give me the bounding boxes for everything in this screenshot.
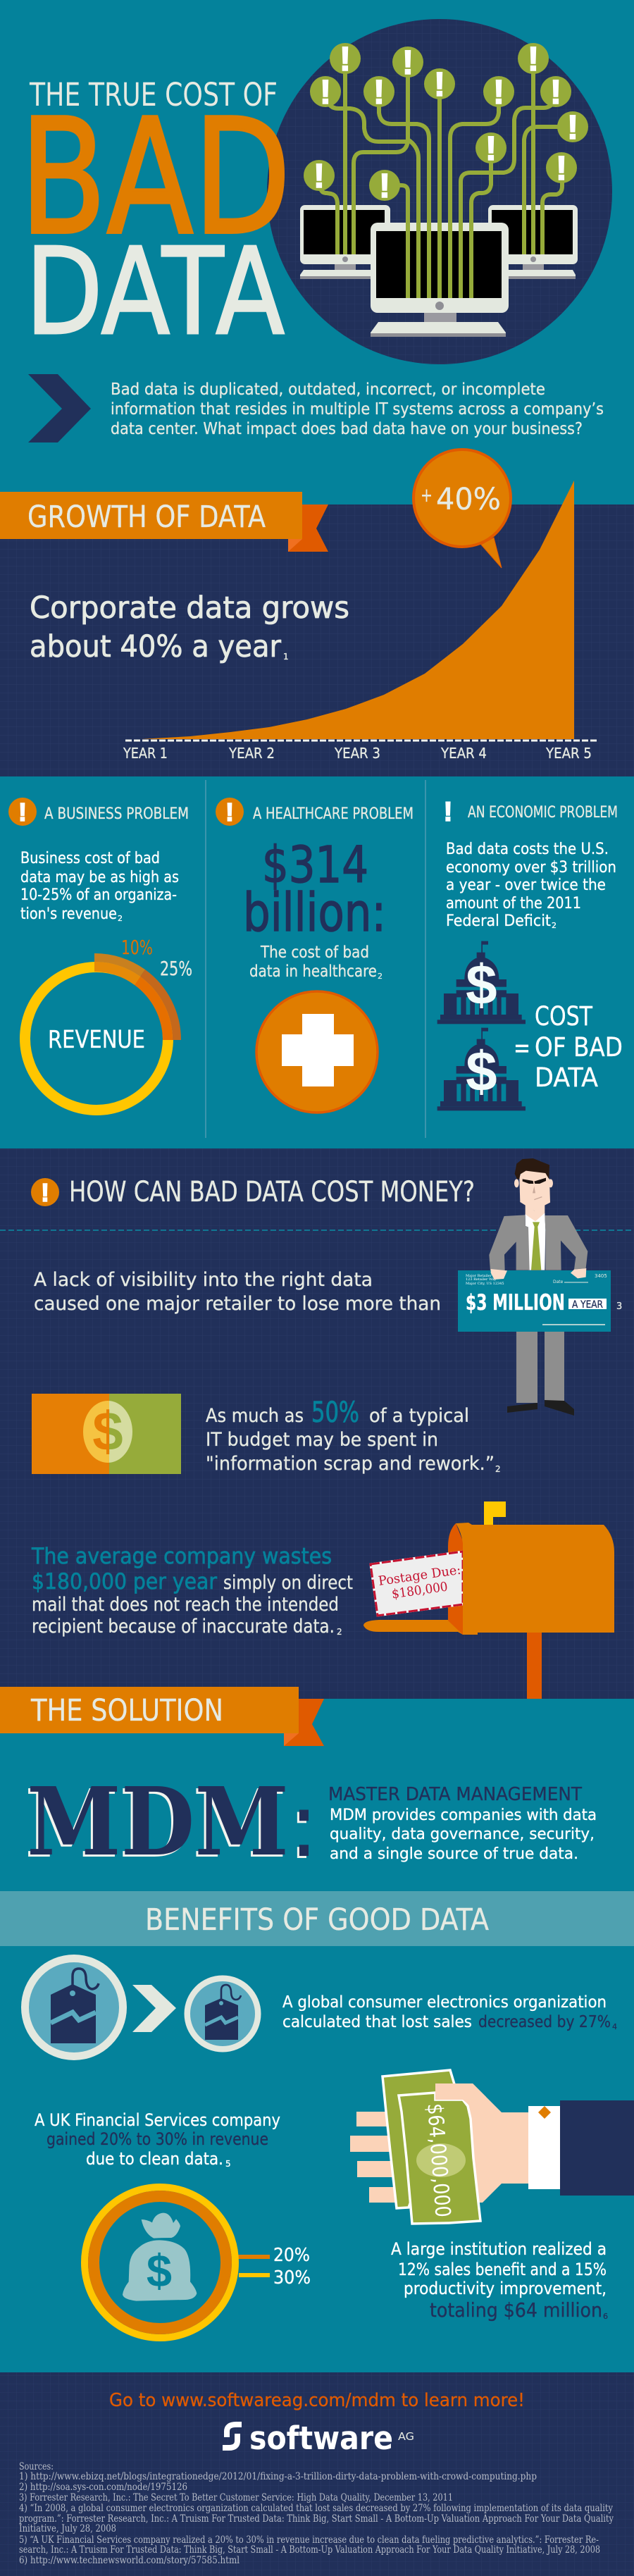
chart: revenue ring: REVENUE [48,1026,145,1054]
icon: banknote [32,1394,181,1474]
text: lost sales decreased: 4 [612,2022,617,2031]
back bill [383,2070,454,2208]
text: economy cost: 2 [552,921,557,930]
icon: mailbox [363,1501,614,1699]
text: 50% of it budget: of a typical [369,1405,469,1427]
text: cost in healthcare: 2 [378,972,383,981]
icon: alert: ! [18,798,27,826]
icon: large price tag [21,1955,127,2060]
text: lost sales decreased: A global consumer electronics organization [282,1993,607,2012]
icon: alert: ! [225,798,234,826]
icon: alert [216,798,244,826]
arrow: chevron [132,1985,176,2032]
title: BAD [20,85,291,271]
stat: $314 billion [243,836,386,943]
text: corporate data grows: about 40% a year [30,629,281,664]
icon: alert mark: ! [444,797,452,827]
sources [19,2461,614,2566]
icon: small price tag [185,1976,261,2052]
banner: the solution: THE SOLUTION [30,1693,223,1728]
area chart: data growth: YEAR 2 [228,745,275,762]
icon: capitol with dollar [437,941,526,1024]
banner: the solution [0,1687,324,1746]
text: uk financial services: due to clean data. [86,2149,223,2169]
text: = cost of bad data: = [514,1033,530,1063]
area chart: data growth: YEAR 5 [545,745,592,762]
check: $3 million a year: Major Retailer [466,1274,492,1278]
logo text: MDM: : [289,1773,319,1877]
area chart: data growth: YEAR 4 [440,745,487,762]
text: business cost: 10-25% of an organiza- [20,886,177,904]
alert balloons: ! [556,150,567,187]
text: economy cost: Bad data costs the U.S. [446,841,609,858]
text: $180,000 wasted: recipient because of inaccurate data. [32,1616,335,1637]
text: large institution: totaling $64 million [430,2298,602,2322]
text: = cost of bad data: COST [535,1001,592,1032]
sources: Initiative, July 28, 2008 [19,2523,116,2534]
alert balloons: ! [379,168,390,205]
panel dividers [206,780,425,1138]
logo: software ag: AG [398,2430,414,2443]
title: THE TRUE COST OF [29,76,278,113]
text: uk financial services: A UK Financial Services company [35,2110,280,2130]
alert balloons [304,41,588,205]
intro text [111,380,604,438]
text: 50% of it budget: As much as [206,1405,304,1427]
sources: Sources: [19,2461,54,2472]
text: business cost: 2 [118,914,123,923]
panel: a healthcare problem [216,798,414,1113]
heading: a healthcare problem: A HEALTHCARE PROBLEM [253,805,414,823]
alert balloons: ! [402,44,414,82]
intro text: Bad data is duplicated, outdated, incorrect, or incomplete [111,380,545,399]
text: cost in healthcare: data in healthcare [249,962,377,981]
front bill [399,2093,480,2224]
text: master data management: MDM provides companies with data [330,1807,597,1824]
heading: how can bad data cost money: HOW CAN BAD DATA COST MONEY? [69,1176,475,1208]
heading band: benefits of good data: BENEFITS OF GOOD DATA [145,1902,490,1938]
chart: revenue ring with money bag [85,2187,311,2338]
stat: $314 billion: billion: [243,881,386,943]
text: lost sales decreased [282,1993,617,2031]
text: retailer loss: A lack of visibility into the right data [34,1269,373,1291]
text: 50% of it budget: "information scrap and rework.” [206,1453,495,1475]
text: master data management: MASTER DATA MANAGEMENT [328,1784,582,1805]
text: corporate data grows [30,590,349,664]
callout: +40%: + [421,483,433,507]
icon: alert [8,798,37,826]
text: $180,000 wasted: The average company wastes [31,1544,332,1569]
text: 50% of it budget [206,1397,501,1475]
icon: alert: ! [41,1178,49,1207]
text: cost in healthcare [249,943,383,981]
text: master data management [328,1784,597,1863]
text: cost in healthcare: The cost of bad [260,943,369,962]
illustration: businessman holding check [458,1158,611,1416]
logo text: MDM: : [287,1775,317,1879]
logo: software ag: software [249,2420,393,2457]
text: business cost: data may be as high as [20,869,179,886]
panel: an economic problem [437,797,623,1110]
text: uk financial services [35,2110,280,2169]
chart: revenue ring with money bag: 30% [273,2267,311,2289]
alert balloons: ! [550,74,561,111]
alert balloons: ! [373,74,385,111]
icon: intro chevron [28,374,91,442]
sources: 2) http://soa.sys-con.com/node/1975126 [19,2482,187,2493]
panel: a business problem [8,798,192,1110]
panel: the solution [0,1687,597,1879]
alert balloons: ! [485,130,497,168]
text: = cost of bad data [514,1001,623,1093]
text: = cost of bad data: DATA [535,1063,598,1093]
panel: benefits of good data [0,1891,634,2338]
heading band: benefits of good data [0,1891,634,1946]
icon: banknote: $ [92,1400,123,1462]
icon: capitol with dollar: $ [466,953,497,1016]
text: lost sales decreased: decreased by 27% [478,2013,611,2031]
legs and shoes [507,1328,574,1416]
text: business cost [20,850,179,923]
sources: 1) http://www.ebizq.net/blogs/integrationedge/2012/01/fixing-a-3-trillion-dirty-data-problem-with-crowd-computing.php [19,2471,537,2482]
text: economy cost: economy over $3 trillion [446,859,616,877]
chart: revenue ring [25,936,192,1110]
text: economy cost: Federal Deficit [446,912,551,930]
icon: capitol with dollar [437,1028,526,1110]
logo text: MDM: MDM [25,1769,287,1879]
upper body and head [489,1158,588,1270]
panel: growth of data [0,450,597,762]
text: retailer loss: caused one major retailer to lose more than [34,1293,441,1315]
text: retailer loss [34,1269,441,1315]
icon: center monitor [371,223,509,337]
intro text: data center. What impact does bad data have on your business? [111,420,583,438]
alert balloons: ! [493,74,504,111]
area chart: data growth [123,481,597,762]
text: 50% of it budget: 50% [311,1397,359,1429]
chart: revenue ring: 25% [160,957,192,980]
call to action: Go to www.softwareag.com/mdm to learn more! [109,2390,525,2411]
sources: 3) Forrester Research, Inc.: The Secret To Better Customer Service: High Data Quality, December 13, 2011 [19,2492,453,2503]
text: master data management: and a single source of true data. [330,1845,578,1863]
callout: +40% [414,450,511,568]
icon: alert [31,1178,59,1207]
alert balloons: ! [434,66,445,104]
illustration: hand holding money [350,2070,634,2224]
check: $3 million a year: A YEAR [572,1299,603,1311]
icon: money bag: $ [147,2245,172,2296]
text: economy cost: a year - over twice the [446,877,606,894]
panel: hero illustration of monitors and alerts [267,19,612,364]
panel: how can bad data cost money [0,1158,634,1699]
area chart: data growth: YEAR 1 [123,745,168,762]
title: DATA [25,223,285,362]
icon: money bag [123,2213,197,2301]
logo text: MDM: MDM [27,1767,289,1877]
banner: growth of data: GROWTH OF DATA [27,500,266,535]
stat: $314 billion: $314 [262,836,368,894]
text: large institution: productivity improvement, [404,2279,607,2298]
banner: growth of data [0,492,328,552]
circuit wires [319,58,573,298]
alert balloons: ! [320,74,331,111]
chart: revenue ring with money bag: 20% [273,2245,310,2266]
alert balloons: ! [567,109,578,147]
area chart: data growth: YEAR 3 [334,745,380,762]
check: $3 million a year: Date [553,1280,564,1284]
cuff and sleeve [528,2106,560,2189]
text: $180,000 wasted: simply on direct [223,1572,353,1594]
text: large institution: A large institution realized a [391,2239,607,2259]
text: corporate data grows: 1 [283,652,289,662]
text: 50% of it budget: 2 [495,1464,501,1474]
check: $3 million a year: 3405 [595,1273,607,1279]
check: $3 million a year: 123 Retailer Way [466,1277,497,1282]
check: $3 million a year: $3 MILLION [466,1290,565,1315]
illustration: hand holding money: $64,000,000 [422,2103,455,2218]
text: uk financial services: 5 [225,2159,231,2169]
icon: left monitor [300,205,390,279]
sources: 6) http://www.technewsworld.com/story/57585.html [19,2555,240,2566]
text: economy cost: amount of the 2011 [446,895,581,912]
text: corporate data grows: Corporate data grows [30,590,349,626]
icon: banknote: $ [92,1400,123,1462]
text: master data management: quality, data governance, security, [330,1826,595,1843]
text: large institution: 6 [603,2312,608,2321]
title [20,76,291,362]
alert balloons: ! [528,41,539,78]
alert balloons: ! [313,158,325,195]
heading: a business problem: A BUSINESS PROBLEM [44,805,189,823]
alert balloons: ! [340,41,351,78]
panel: footer [19,2390,614,2566]
footnote 3: 3 [616,1301,622,1312]
text: 50% of it budget: IT budget may be spent in [206,1429,438,1451]
text: uk financial services: gained 20% to 30% in revenue [46,2129,268,2149]
callout: +40%: 40% [436,482,501,517]
postage due card: Postage Due: [378,1563,462,1589]
text: $180,000 wasted [31,1544,353,1637]
text: business cost: Business cost of bad [20,850,160,867]
hands [491,1268,586,1280]
check: $3 million a year [458,1270,611,1332]
text: $180,000 wasted: mail that does not reach the intended [32,1594,339,1616]
text: large institution [391,2239,608,2322]
postage due card: $180,000 [391,1580,449,1602]
text: $180,000 wasted: $180,000 per year [32,1569,217,1594]
palm [435,2083,528,2203]
icon: right monitor [488,205,578,279]
check: $3 million a year: Major City, US 12345 [466,1282,504,1286]
icon: capitol with dollar: $ [466,1040,497,1103]
text: lost sales decreased: calculated that lost sales [282,2013,472,2031]
postage due card [371,1552,463,1616]
text: economy cost [446,841,616,930]
icon: medical cross [256,991,378,1113]
text: $180,000 wasted: 2 [337,1627,342,1637]
chart: revenue ring: 10% [121,936,153,959]
text: business cost: tion's revenue [20,905,117,923]
text: = cost of bad data: OF BAD [535,1032,623,1063]
